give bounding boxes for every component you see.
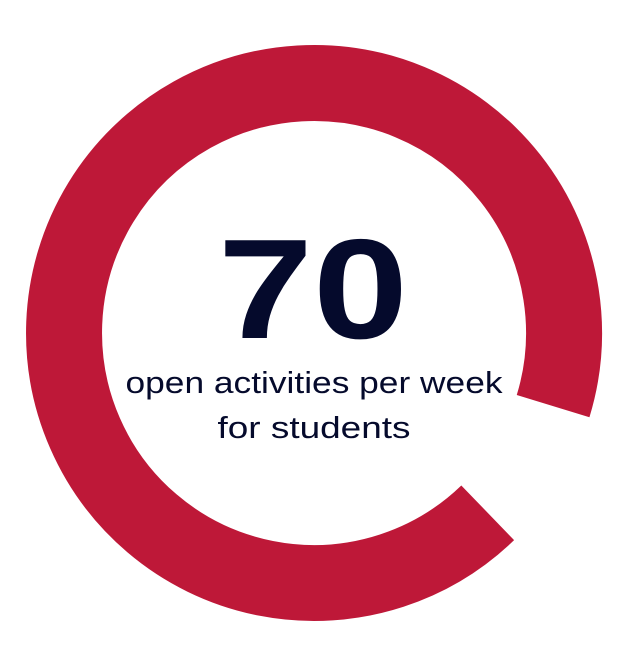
red ring arc [64,83,564,583]
caption text [126,365,503,445]
caption text: open activities per week [126,365,503,400]
big number 70: 70 [218,210,408,369]
caption text: for students [218,410,410,445]
